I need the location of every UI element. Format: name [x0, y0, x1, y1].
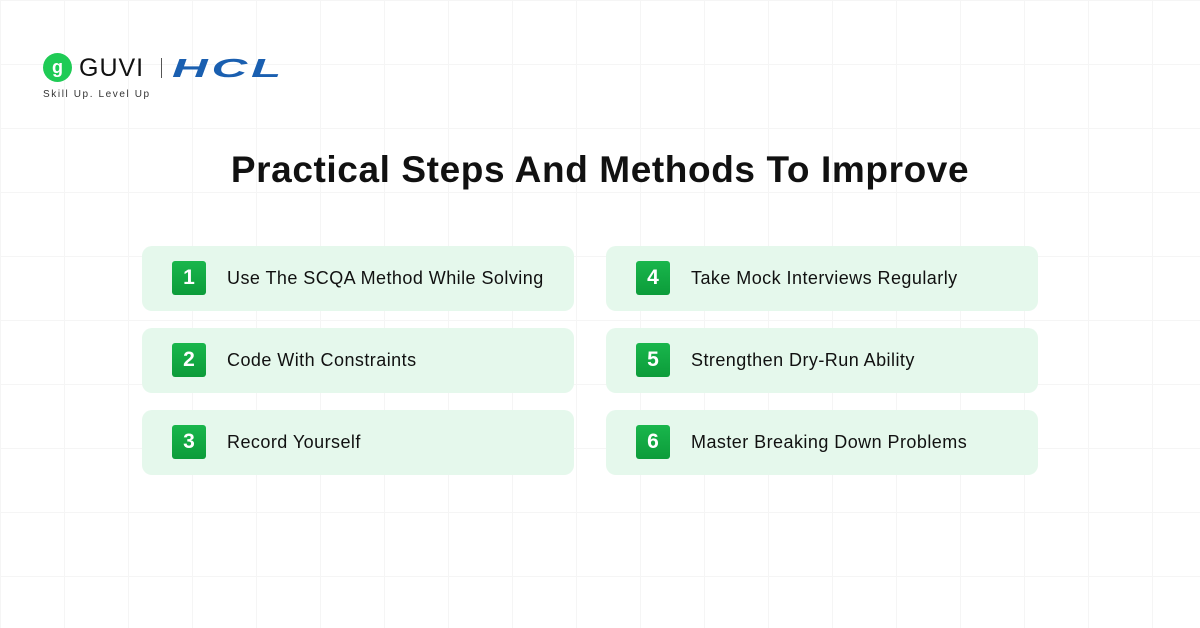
tagline: Skill Up. Level Up — [43, 89, 151, 100]
card 1: 1 — [183, 266, 195, 289]
card 3 — [142, 410, 574, 475]
card 4: 4 — [647, 266, 659, 289]
card 6 — [606, 410, 1038, 475]
card 2: 2 — [183, 348, 195, 371]
icon: guvi circle — [43, 53, 72, 82]
card 1: Use The SCQA Method While Solving — [227, 268, 544, 288]
card 2: Code With Constraints — [227, 350, 417, 370]
card 5: Strengthen Dry-Run Ability — [691, 350, 915, 370]
title: Practical Steps And Methods To Improve — [231, 149, 969, 190]
icon: guvi circle: g — [52, 57, 63, 77]
card 3: 3 — [183, 430, 195, 453]
card 3: Record Yourself — [227, 432, 361, 452]
card 4 — [606, 246, 1038, 311]
card 5: 5 — [647, 348, 659, 371]
logo — [43, 53, 285, 100]
card 1 — [142, 246, 574, 311]
guvi wordmark: GUVI — [79, 54, 144, 82]
card 4: Take Mock Interviews Regularly — [691, 268, 958, 288]
hcl wordmark: HCL — [172, 53, 285, 83]
card 5 — [606, 328, 1038, 393]
card 2 — [142, 328, 574, 393]
card 6: 6 — [647, 430, 659, 453]
card 6: Master Breaking Down Problems — [691, 432, 967, 452]
